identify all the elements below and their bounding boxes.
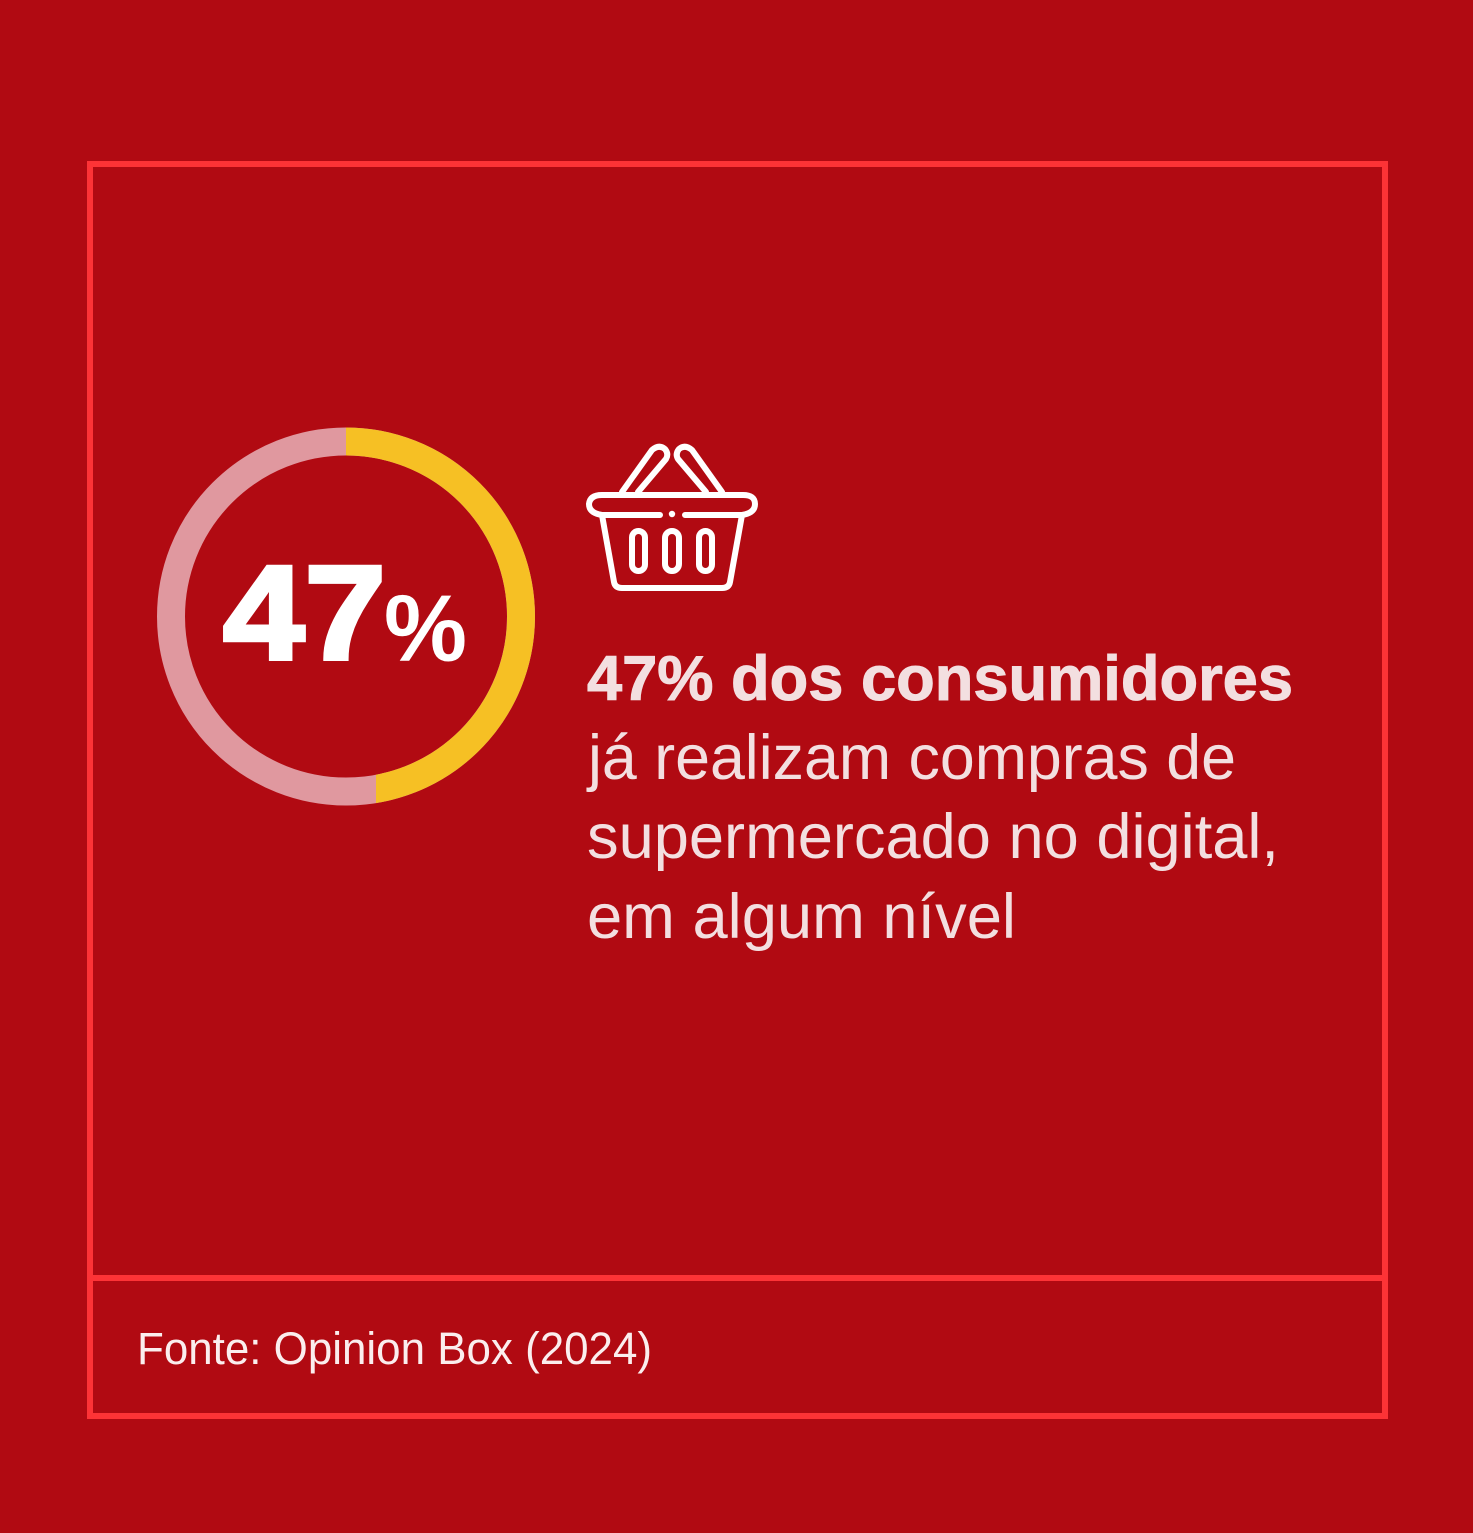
heading line: 47% dos consumidores <box>587 644 1293 714</box>
text block: main statement <box>586 644 1293 952</box>
body line 2: supermercado no digital, <box>587 802 1279 872</box>
body line 1: já realizam compras de <box>586 723 1236 793</box>
donut chart: 47% <box>171 428 535 803</box>
body line 3: em algum nível <box>587 882 1016 952</box>
panel: outer frame <box>90 164 1385 1416</box>
donut value: 47 <box>223 539 386 688</box>
donut percent sign: % <box>384 576 467 682</box>
icon: shopping basket <box>589 447 755 588</box>
source note: Fonte: Opinion Box (2024) <box>137 1323 652 1374</box>
